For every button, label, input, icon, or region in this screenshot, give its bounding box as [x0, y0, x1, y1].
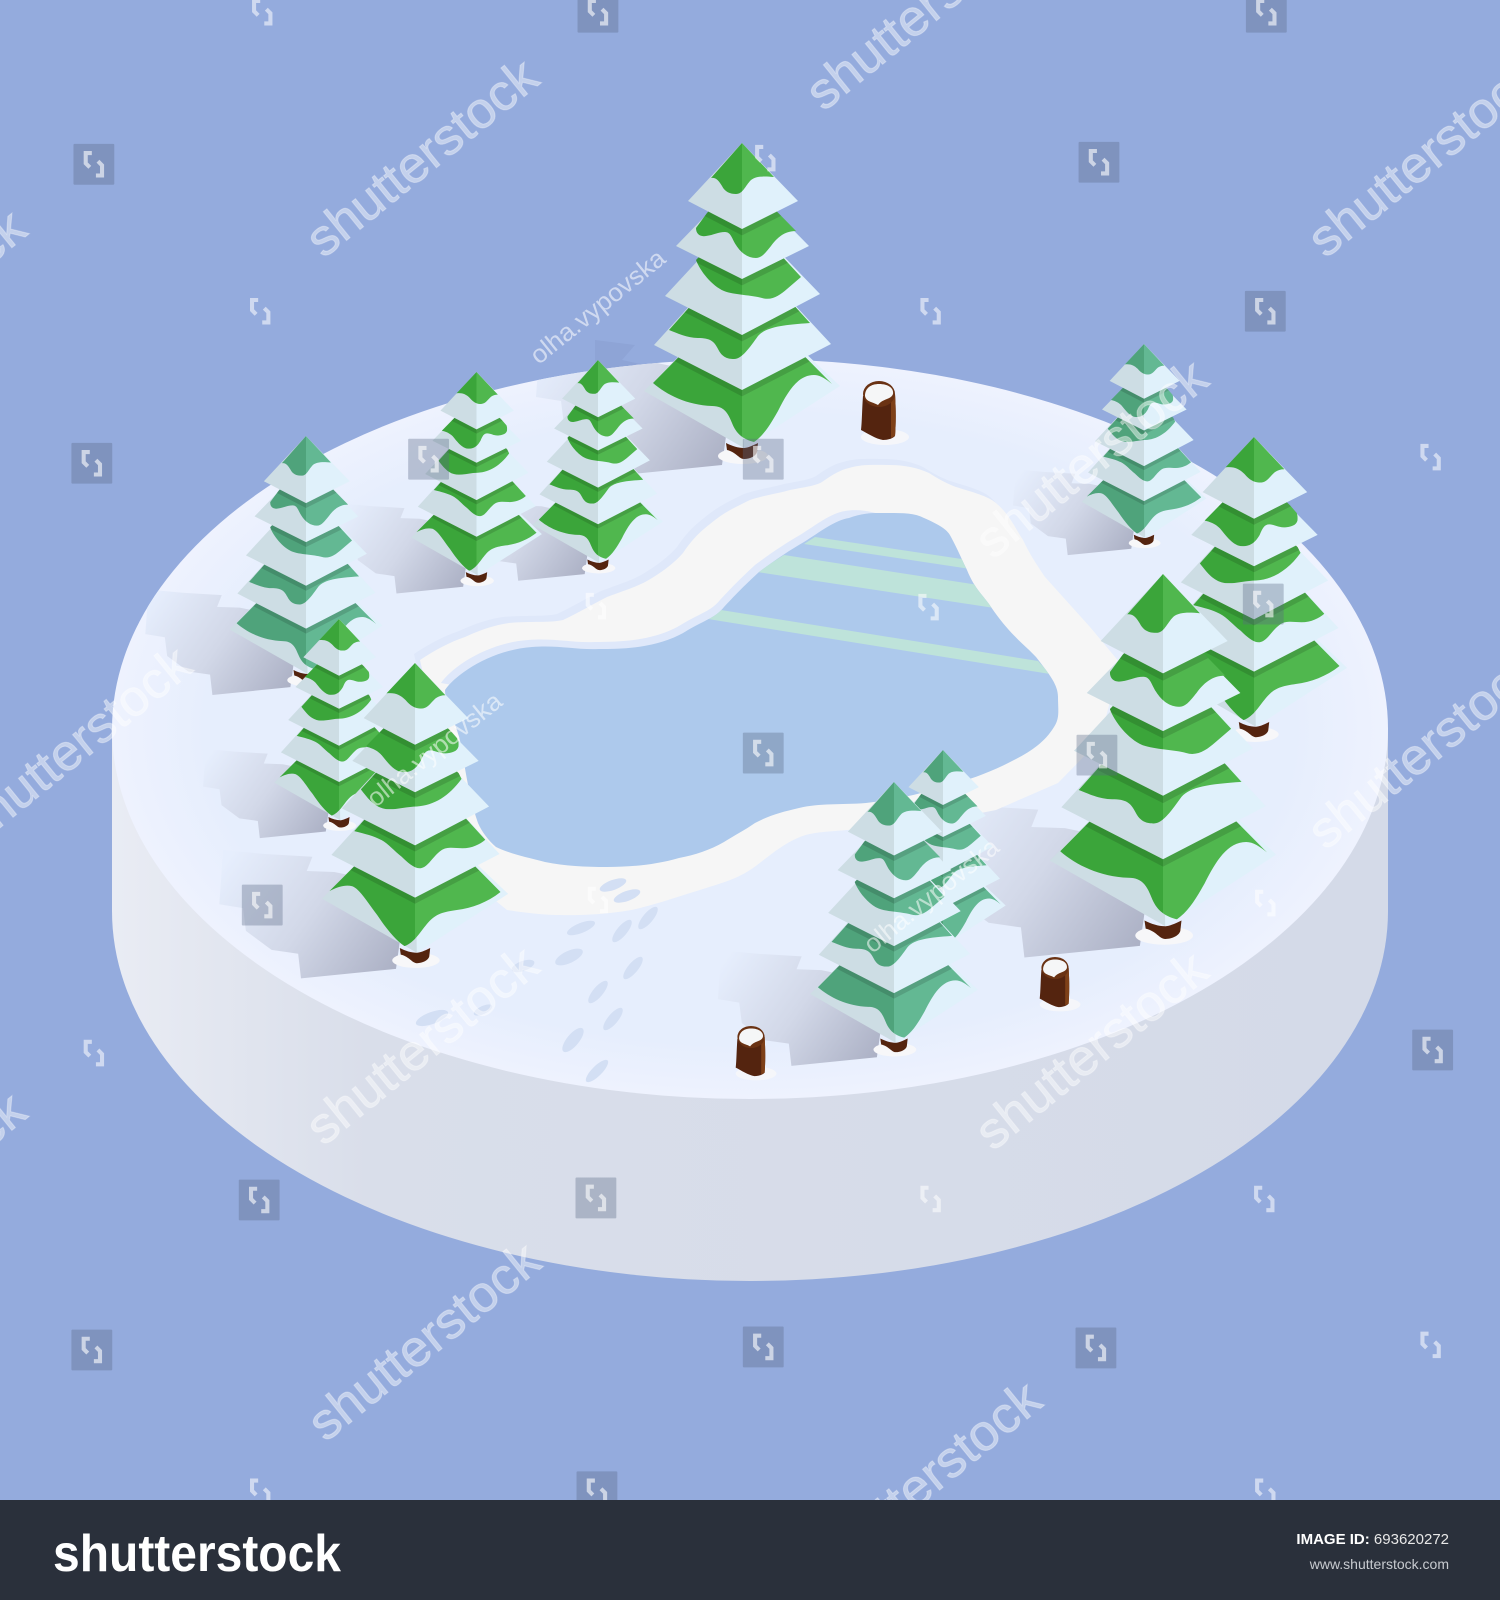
- stump: front left: [736, 1026, 776, 1080]
- contributor watermarks: olha.vypovska: [859, 832, 1005, 959]
- shutterstock watermarks: shutterstock: [295, 934, 549, 1155]
- snowy path halo: [414, 459, 1114, 909]
- tree: large right: [1024, 574, 1302, 945]
- tree: front left: [301, 663, 529, 968]
- tree: small teal behind: [866, 750, 1020, 955]
- snow disc top: [112, 359, 1388, 1099]
- contributor watermarks: olha.vypovska: [525, 244, 672, 370]
- contributor watermarks: [362, 244, 1005, 959]
- frozen lake edge shadow: [441, 510, 893, 693]
- shutterstock watermarks: shutterstock: [964, 939, 1218, 1161]
- tree shadows: [145, 340, 1154, 1066]
- shutterstock watermarks: shutterstock: [297, 1230, 551, 1451]
- tree: back centre: [518, 360, 678, 573]
- contributor watermarks: olha.vypovska: [362, 687, 508, 813]
- tree: back right teal: [1068, 344, 1220, 548]
- footer image id: IMAGE ID: 693620272: [1296, 1531, 1449, 1548]
- tree: large back tree: [622, 143, 862, 464]
- footprints: [414, 876, 661, 1085]
- frozen lake: [445, 513, 1058, 867]
- tree: front teal: [791, 782, 997, 1056]
- shutterstock watermarks: shutterstock: [964, 348, 1218, 569]
- footer logo: shutterstock: [53, 1525, 341, 1583]
- tree: left small: [260, 619, 418, 831]
- tree: back left: [396, 372, 557, 586]
- tree: right: [1140, 437, 1368, 742]
- tree shadow tip on sky: [595, 340, 660, 372]
- shutterstock watermarks: shutterstock: [798, 1369, 1052, 1590]
- tree: far left teal: [212, 436, 400, 686]
- snowy path ring: [420, 465, 1120, 915]
- footer url: www.shutterstock.com: [1309, 1556, 1449, 1572]
- stump: front right: [1040, 957, 1080, 1011]
- shutterstock watermarks: shutterstock: [295, 47, 549, 268]
- ice streaks: [708, 537, 1050, 674]
- footer bar: [0, 1500, 1500, 1600]
- stump: back: [861, 381, 909, 445]
- snow disc side: [112, 729, 1388, 1281]
